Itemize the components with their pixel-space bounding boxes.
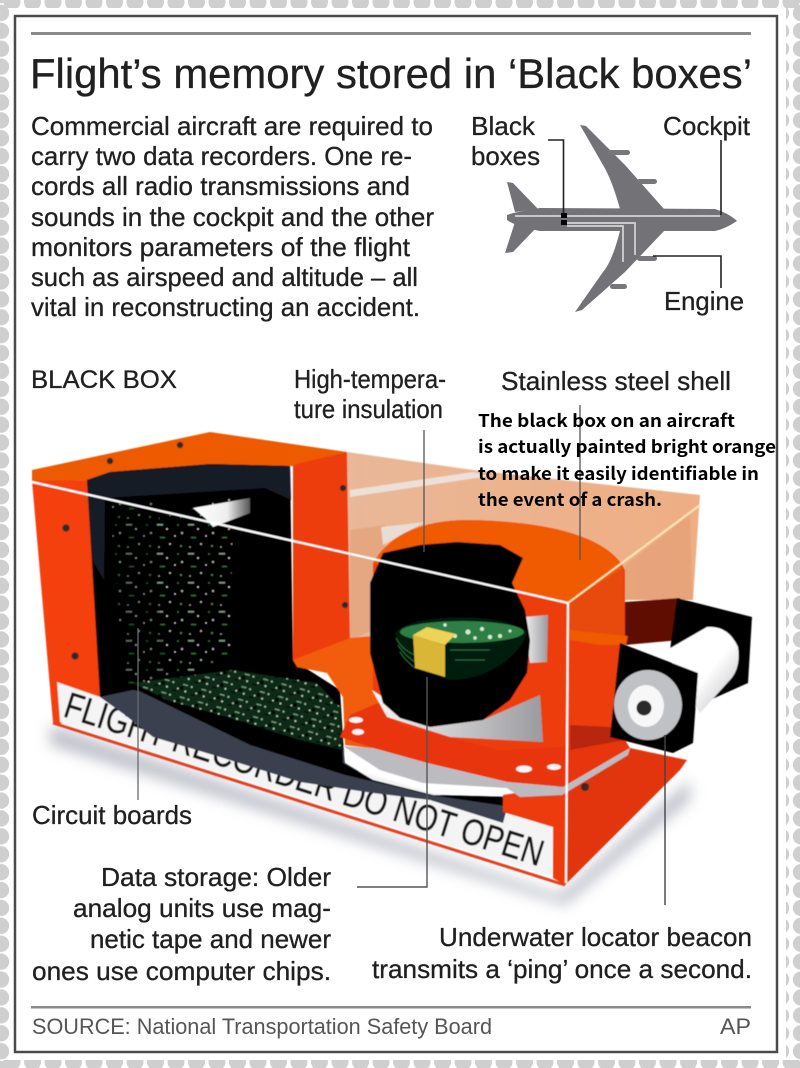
callout: orange paint note bbox=[478, 408, 776, 512]
title: Flight’s memory stored in ‘Black boxes’ bbox=[30, 50, 752, 97]
base plinth bbox=[565, 748, 687, 885]
glass shell outline bbox=[32, 482, 568, 883]
icon: airplane silhouette bbox=[505, 125, 737, 312]
icon: engines bbox=[607, 150, 657, 289]
callout: orange paint note: is actually painted bright orange bbox=[478, 434, 776, 459]
label: cockpit: Cockpit bbox=[663, 111, 751, 141]
cylinder dome top bbox=[373, 520, 623, 603]
recorder left block bbox=[32, 432, 350, 724]
illustration: flight recorder cutaway bbox=[32, 432, 752, 905]
label: data storage bbox=[32, 862, 331, 986]
leader lines bbox=[548, 140, 721, 288]
screws bbox=[62, 442, 348, 660]
label: underwater locator beacon bbox=[372, 922, 752, 984]
callout: orange paint note: the event of a crash. bbox=[478, 487, 662, 512]
cavity bbox=[87, 464, 345, 770]
underwater locator beacon bbox=[610, 598, 752, 753]
insulation cutaway bbox=[370, 542, 530, 727]
label: black boxes: boxes bbox=[471, 141, 540, 171]
orange floor bbox=[293, 635, 385, 750]
label: data storage: analog units use mag- bbox=[73, 893, 331, 923]
leader: data storage bbox=[357, 677, 427, 887]
intro text block: cords all radio transmissions and bbox=[31, 171, 410, 201]
intro text block: monitors parameters of the flight bbox=[31, 232, 411, 262]
black box heading: BLACK BOX bbox=[31, 366, 177, 394]
top rule bbox=[31, 32, 751, 35]
label: data storage: netic tape and newer bbox=[90, 924, 331, 954]
bottom rule bbox=[31, 1006, 751, 1008]
wiring lines bbox=[515, 216, 720, 262]
intro text block: Commercial aircraft are required to bbox=[31, 111, 433, 141]
label: high-temperature insulation: High-tempera- bbox=[294, 364, 446, 394]
leader: circuit boards bbox=[137, 628, 139, 800]
label: engine: Engine bbox=[664, 286, 744, 316]
flange bbox=[340, 700, 630, 797]
label: high-temperature insulation bbox=[294, 364, 446, 424]
label: stainless steel shell: Stainless steel shell bbox=[501, 366, 731, 396]
label strip with text bbox=[53, 682, 565, 885]
credit: AP bbox=[720, 1014, 751, 1039]
leader: locator beacon bbox=[664, 735, 666, 905]
source line: SOURCE: National Transportation Safety Board bbox=[32, 1014, 492, 1039]
label: underwater locator beacon: transmits a ‘ping’ once a second. bbox=[372, 954, 752, 984]
circuit boards bbox=[110, 497, 343, 750]
label: underwater locator beacon: Underwater locator beacon bbox=[439, 922, 752, 952]
transparent shell volume bbox=[347, 452, 700, 640]
drop shadow bbox=[50, 725, 690, 905]
cylinder body bbox=[373, 520, 625, 750]
intro text block: such as airspeed and altitude – all bbox=[31, 262, 418, 292]
intro text block: sounds in the cockpit and the other bbox=[31, 202, 434, 232]
data storage disk bbox=[395, 617, 527, 680]
leader: stainless steel shell bbox=[579, 405, 581, 560]
label: circuit boards: Circuit boards bbox=[32, 800, 192, 830]
connector bbox=[625, 598, 680, 645]
label: data storage: Data storage: Older bbox=[101, 862, 331, 892]
label: data storage: ones use computer chips. bbox=[32, 956, 331, 986]
leader: insulation bbox=[423, 430, 425, 552]
yellow chip bbox=[413, 635, 445, 677]
intro text block: vital in reconstructing an accident. bbox=[31, 292, 420, 322]
intro text block bbox=[31, 111, 434, 322]
callout: orange paint note: The black box on an aircraft bbox=[478, 408, 736, 433]
label: black boxes bbox=[471, 111, 540, 171]
intro text block: carry two data recorders. One re- bbox=[31, 141, 412, 171]
label: high-temperature insulation: ture insulation bbox=[294, 394, 443, 424]
icon: black boxes marker bbox=[561, 213, 567, 225]
airplane locator diagram bbox=[471, 111, 751, 316]
label: black boxes: Black bbox=[471, 111, 536, 141]
steel insulation panels bbox=[523, 615, 548, 663]
recorder label text: FLIGHT RECORDER DO NOT OPEN bbox=[60, 685, 549, 874]
callout: orange paint note: to make it easily identifiable in bbox=[478, 461, 759, 486]
cavity floor edge bbox=[100, 690, 510, 823]
